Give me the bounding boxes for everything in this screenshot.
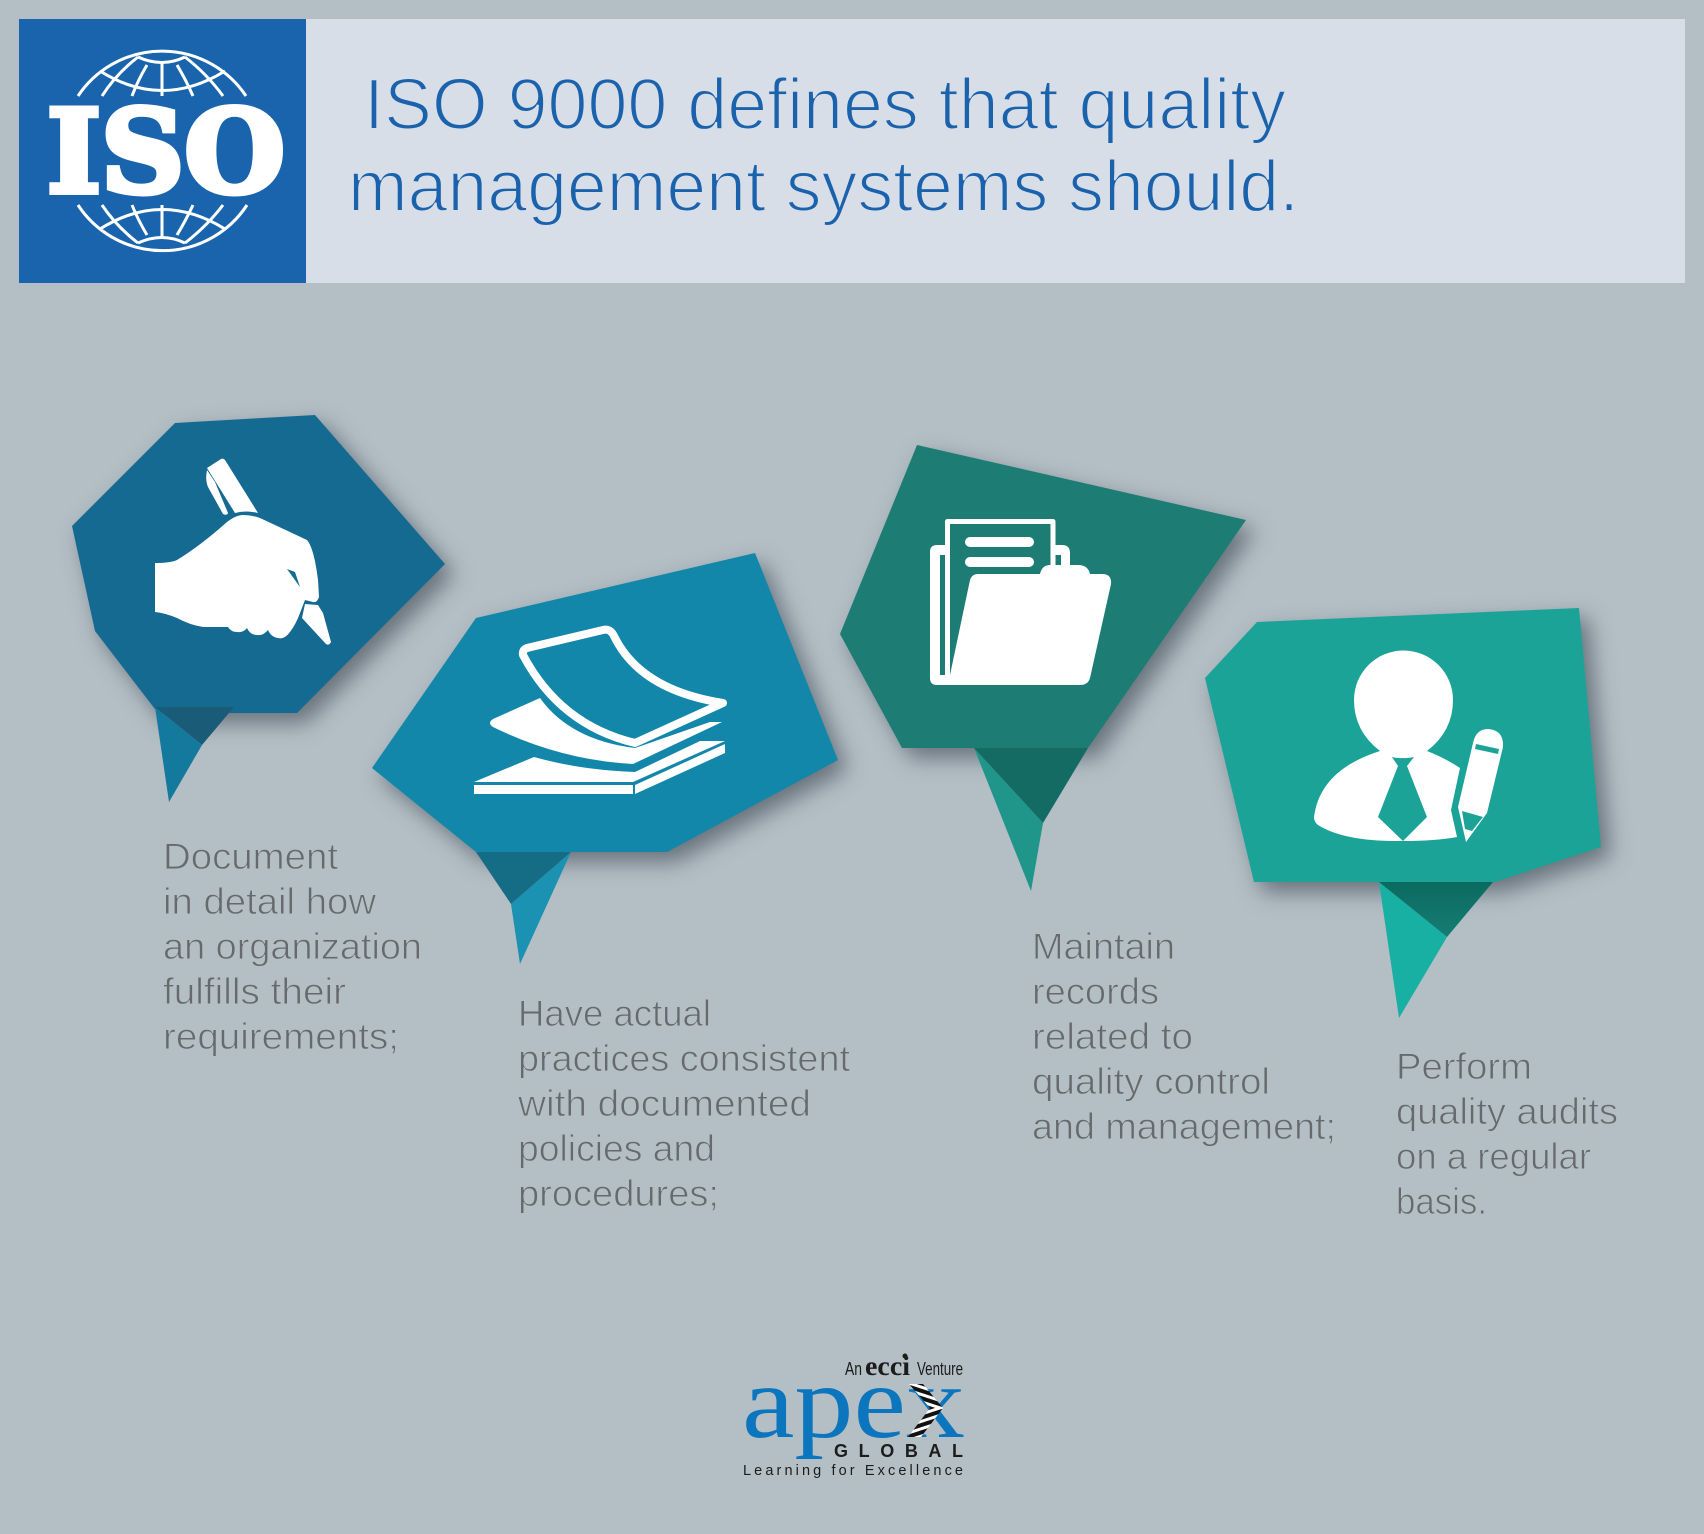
panel 4 tail — [1379, 882, 1493, 1018]
panel 2 text: practices consistent — [518, 1038, 851, 1079]
title: ISO 9000 defines that quality — [364, 65, 1286, 145]
panel 4 text: quality audits — [1396, 1091, 1618, 1132]
panel 2 text: policies and — [518, 1128, 715, 1169]
ISO logo — [19, 19, 306, 283]
icon: person with pencil — [1314, 650, 1503, 842]
panel 2 text: procedures; — [518, 1173, 719, 1214]
header banner — [19, 19, 1685, 283]
panel 2 text: Have actual — [518, 993, 711, 1034]
panel 4 text — [1396, 1046, 1618, 1222]
panel 2: practices — [372, 553, 838, 964]
panel 3 text — [1032, 926, 1336, 1147]
apex global logo: apex — [742, 1345, 965, 1460]
icon: folder — [930, 522, 1111, 685]
apex global logo: GLOBAL — [834, 1441, 963, 1461]
title: management systems should. — [348, 147, 1299, 227]
panel 4 text: on a regular — [1396, 1136, 1591, 1177]
panel 3 text: and management; — [1032, 1106, 1336, 1147]
panel 1 text: requirements; — [163, 1016, 399, 1057]
panel 4 text: Perform — [1396, 1046, 1532, 1087]
panel 2 text — [517, 993, 851, 1214]
panel 3 text: Maintain — [1032, 926, 1175, 967]
ISO wordmark: ISO — [47, 85, 285, 219]
panel 1 text: in detail how — [163, 881, 376, 922]
panel 1 text: an organization — [163, 926, 422, 967]
panel 3 tail — [974, 748, 1088, 891]
panel 4 text: basis. — [1396, 1181, 1487, 1222]
panel 1 text — [163, 836, 422, 1057]
panel 3: records — [840, 445, 1246, 891]
apex global logo: An — [845, 1359, 862, 1379]
apex global logo: ecci — [865, 1351, 911, 1381]
apex global logo: Learning for Excellence — [743, 1463, 963, 1479]
panel 3 text: records — [1032, 971, 1159, 1012]
title — [348, 65, 1299, 227]
panel 1 text: fulfills their — [163, 971, 346, 1012]
icon: hand writing — [155, 459, 331, 645]
panel 2 tail — [476, 852, 571, 964]
icon: stack of paper — [474, 630, 725, 794]
globe top — [78, 51, 246, 96]
panel 2 text: with documented — [517, 1083, 811, 1124]
panel 1: document — [72, 415, 445, 802]
apex global logo: Venture — [917, 1359, 963, 1379]
panel 1 tail — [155, 707, 234, 802]
panel 1 text: Document — [163, 836, 339, 877]
panel 4: audits — [1205, 608, 1601, 1018]
panel 3 text: quality control — [1032, 1061, 1270, 1102]
globe bottom — [78, 205, 247, 251]
panel 3 text: related to — [1032, 1016, 1193, 1057]
